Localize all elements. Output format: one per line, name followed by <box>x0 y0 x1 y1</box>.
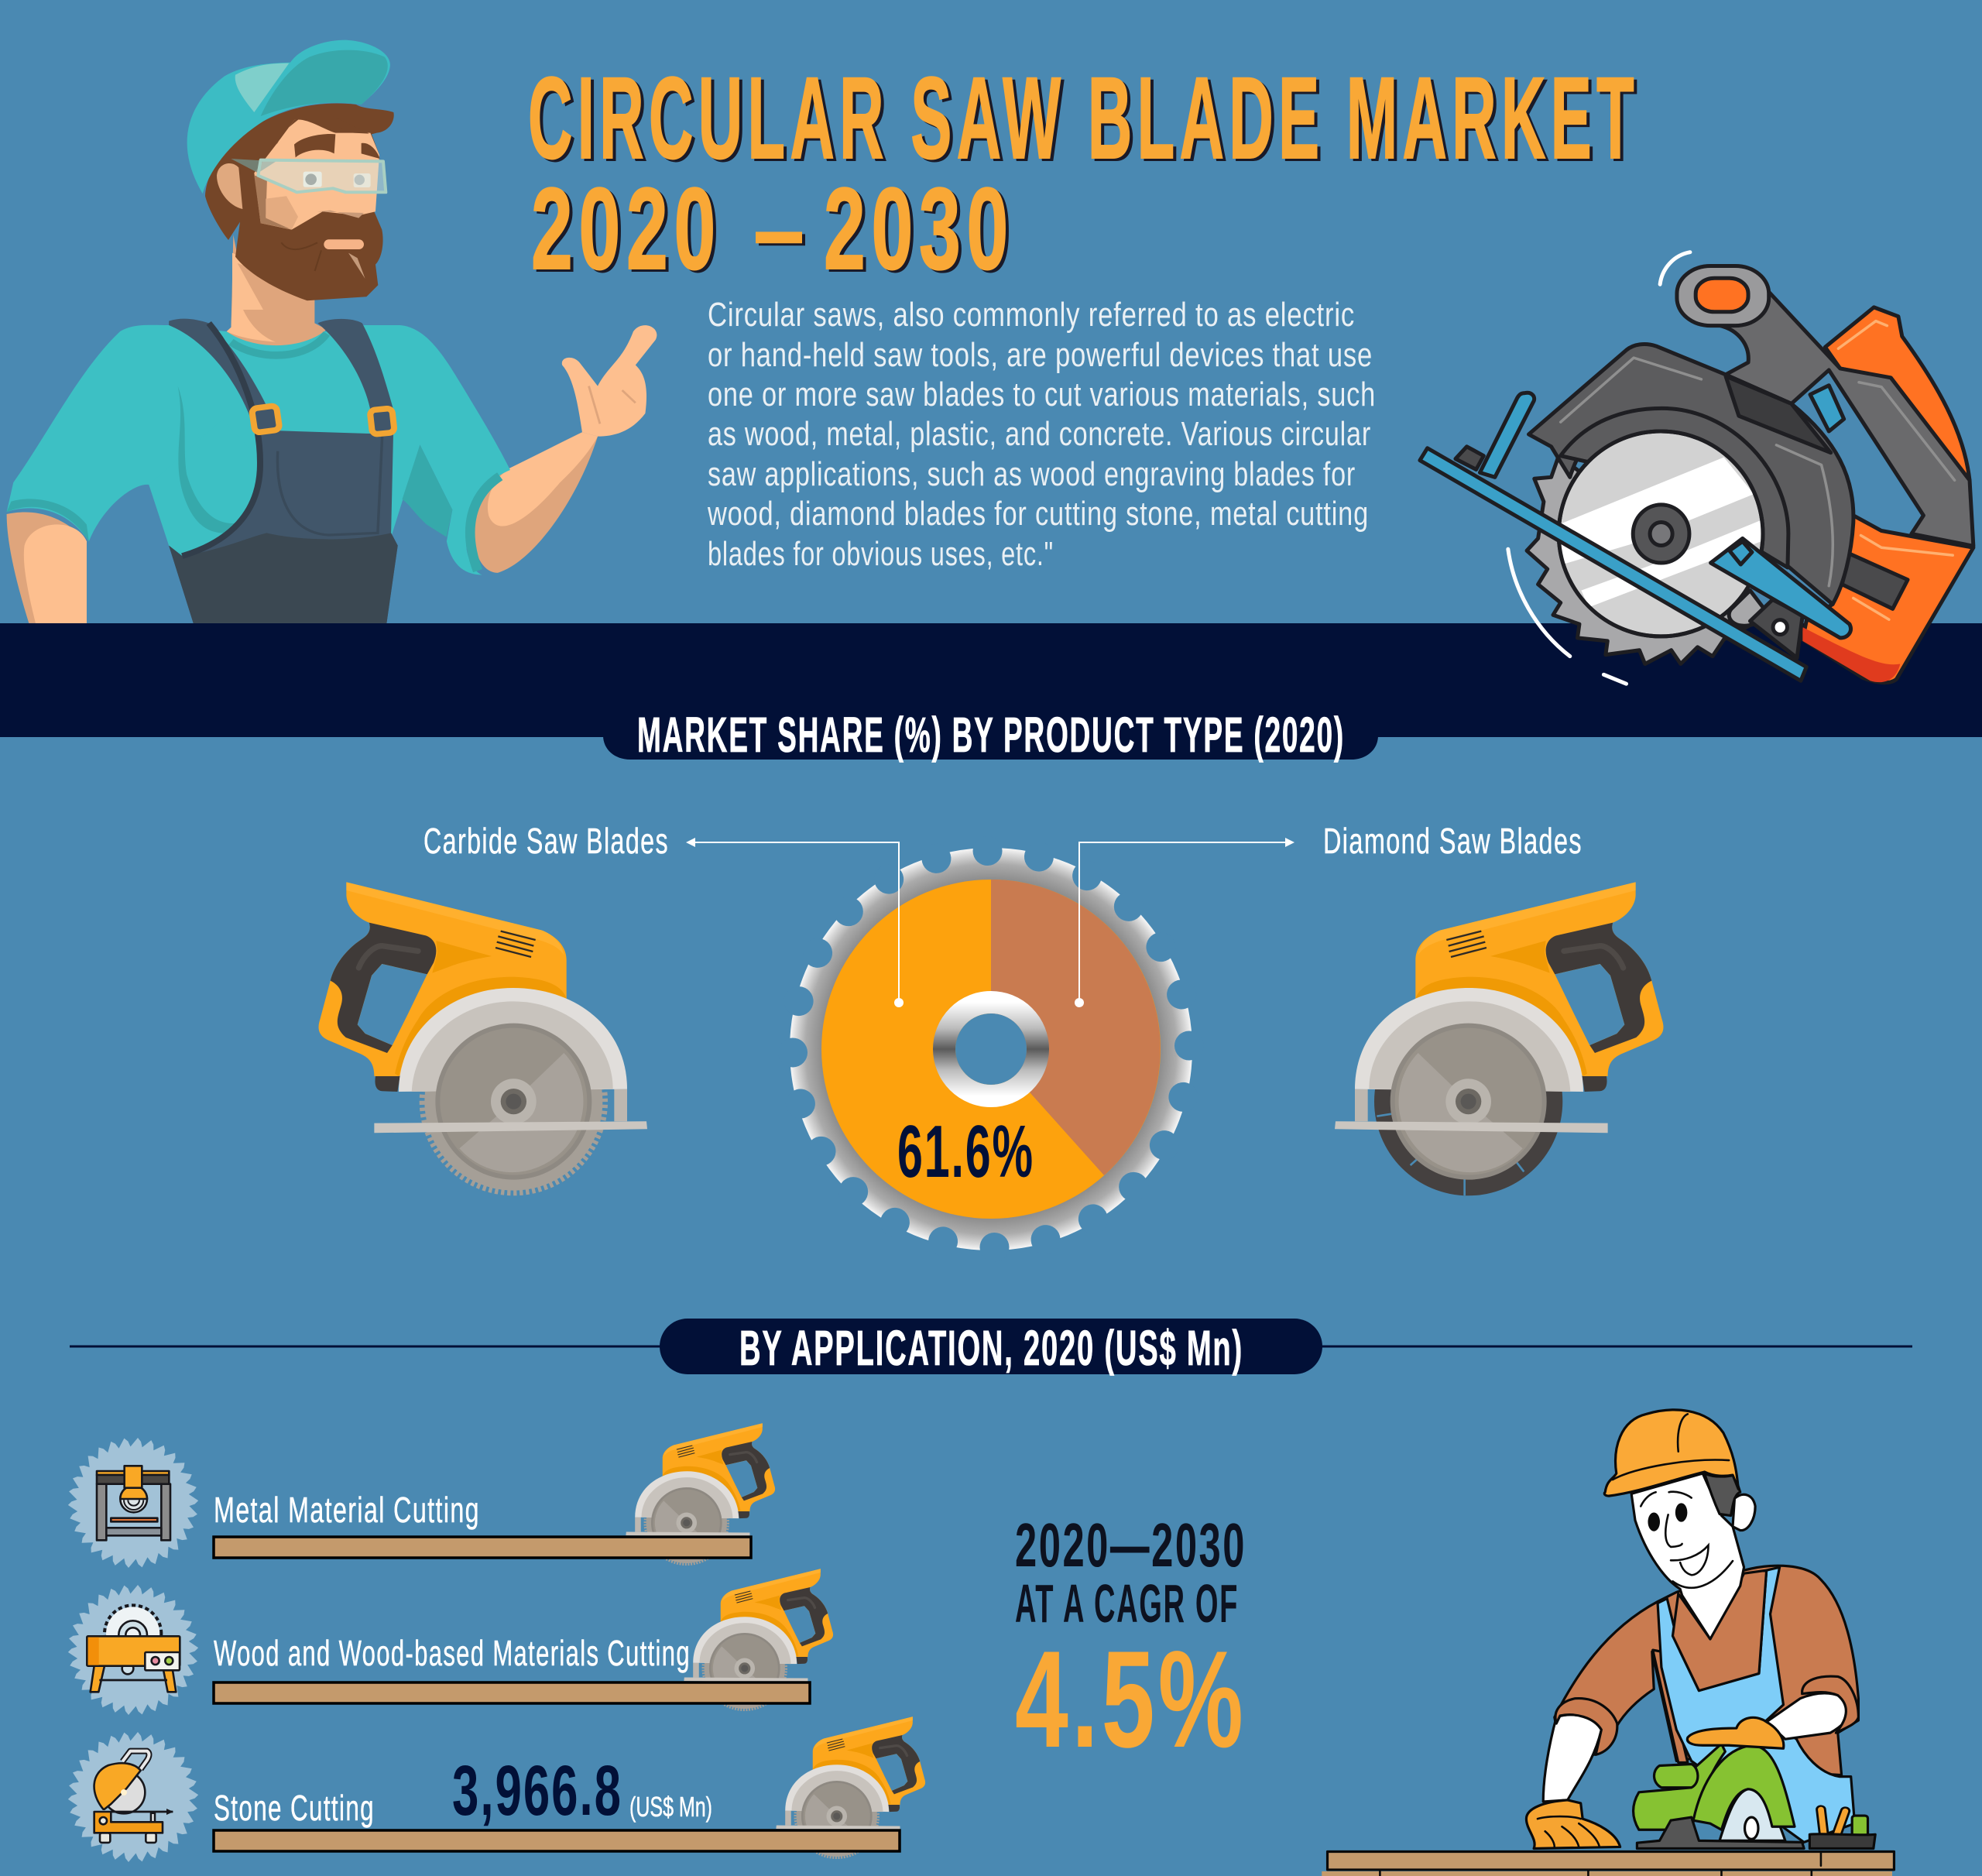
value: 3,966.8: 3,966.8 <box>452 1751 622 1830</box>
heading: by application <box>70 1319 1912 1376</box>
title <box>528 53 1642 296</box>
illustration: bearded worker with cap <box>7 40 657 623</box>
value: 61.6%: 61.6% <box>897 1110 1034 1193</box>
heading: by application: BY APPLICATION, 2020 (US$ Mn) <box>739 1320 1243 1376</box>
saw: carbide <box>319 882 647 1192</box>
icon: metal cutting <box>67 1437 199 1569</box>
intro paragraph: saw applications, such as wood engraving blades for <box>708 455 1356 493</box>
heading: market share: MARKET SHARE (%) BY PRODUCT TYPE (2020) <box>637 707 1345 763</box>
icon: stone cutting <box>67 1731 199 1863</box>
row: wood and wood-based materials cutting: Wood and Wood-based Materials Cutting <box>214 1633 691 1673</box>
intro paragraph: as wood, metal, plastic, and concrete. Various circular <box>708 415 1371 453</box>
callout: CAGR: 4.5% <box>1015 1622 1246 1776</box>
title: — <box>759 166 805 296</box>
callout: CAGR <box>1015 1511 1246 1776</box>
label: carbide: Carbide Saw Blades <box>423 821 669 861</box>
illustration: worker with hard hat <box>1322 1410 1894 1876</box>
leader: carbide <box>686 838 904 1007</box>
icon: wood cutting <box>67 1584 199 1716</box>
intro paragraph: or hand-held saw tools, are powerful devices that use <box>708 336 1373 374</box>
row: stone cutting: Stone Cutting <box>214 1788 375 1828</box>
chart: saw blade pie <box>778 836 1204 1262</box>
heading: market share <box>603 707 1378 763</box>
label: diamond: Diamond Saw Blades <box>1323 821 1583 861</box>
intro paragraph <box>707 296 1376 573</box>
title: — <box>756 163 802 293</box>
row: metal material cutting <box>214 1423 775 1564</box>
leader: diamond <box>1075 838 1294 1007</box>
illustration: orange circular saw <box>1420 252 1973 684</box>
title: 2020 <box>531 163 722 293</box>
callout: CAGR: AT A CAGR OF <box>1015 1573 1239 1634</box>
row: stone cutting <box>214 1717 925 1857</box>
row: wood and wood-based materials cutting <box>214 1569 833 1710</box>
title: 2020 <box>534 166 725 296</box>
intro paragraph: blades for obvious uses, etc." <box>708 535 1054 573</box>
saw: diamond <box>1335 882 1663 1195</box>
callout: CAGR: 2020—2030 <box>1015 1511 1246 1579</box>
intro paragraph: wood, diamond blades for cutting stone, metal cutting <box>707 495 1369 533</box>
row: metal material cutting: Metal Material Cutting <box>214 1490 480 1530</box>
title: 2030 <box>827 166 1017 296</box>
unit: (US$ Mn) <box>629 1791 712 1823</box>
intro paragraph: Circular saws, also commonly referred to as electric <box>708 296 1355 334</box>
dark band <box>0 623 1982 737</box>
intro paragraph: one or more saw blades to cut various materials, such <box>708 376 1376 413</box>
title: 2030 <box>824 163 1014 293</box>
